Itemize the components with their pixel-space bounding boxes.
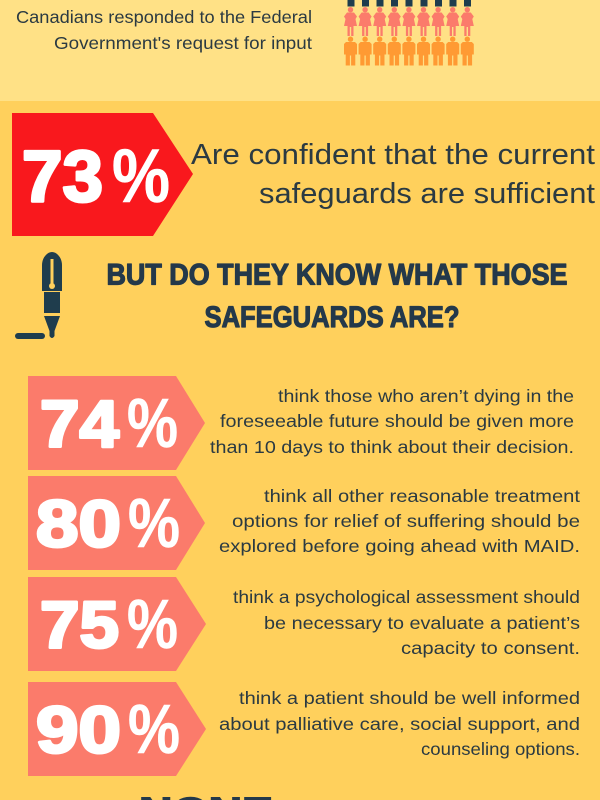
stat: 80%: 80 (36, 486, 121, 560)
heading: SAFEGUARDS ARE? (204, 301, 460, 334)
stat: 80%: options for relief of suffering should be (232, 511, 580, 531)
callout: 73%: 73 (22, 137, 103, 217)
stat: 90%: 90 (36, 692, 121, 766)
stat: 74%: think those who aren’t dying in the (278, 386, 574, 406)
text: confident: Are confident that the current (191, 139, 595, 171)
intro text: Government's request for input (54, 33, 312, 53)
stat: 75%: think a psychological assessment should (233, 587, 580, 607)
text: confident (191, 139, 595, 210)
stat: 75%: 75 (40, 588, 119, 662)
stat: 74%: % (127, 384, 178, 462)
stat: 75%: % (127, 585, 178, 663)
callout: 73% (12, 113, 193, 236)
intro text: Canadians responded to the Federal (16, 7, 312, 27)
stat: 74%: 74 (40, 386, 119, 460)
text: confident: safeguards are sufficient (259, 178, 595, 210)
stat: 80%: explored before going ahead with MAID. (219, 536, 580, 556)
stat: 90%: counseling options. (421, 739, 580, 759)
stat: 74% (28, 376, 574, 470)
heading (106, 258, 568, 334)
stat: 80% (28, 476, 580, 570)
callout: 73%: % (112, 134, 170, 219)
stat: 75% (28, 577, 580, 671)
stat: 74%: than 10 days to think about their decision. (210, 437, 574, 457)
stat: 80%: % (128, 484, 180, 562)
stat: 74%: foreseeable future should be given more (220, 411, 574, 431)
icon: pen (15, 252, 62, 339)
stat: 75%: capacity to consent. (401, 638, 580, 658)
intro text (16, 7, 312, 53)
stat: 90%: % (128, 690, 180, 768)
stat: 75%: be necessary to evaluate a patient’s (264, 613, 580, 633)
stat: 90%: about palliative care, social support, and (219, 714, 580, 734)
top band (0, 0, 600, 101)
stat: 90% (28, 682, 580, 776)
stat: 80%: think all other reasonable treatment (264, 486, 580, 506)
pictogram: people (344, 0, 474, 66)
stat: 90%: think a patient should be well informed (239, 688, 580, 708)
